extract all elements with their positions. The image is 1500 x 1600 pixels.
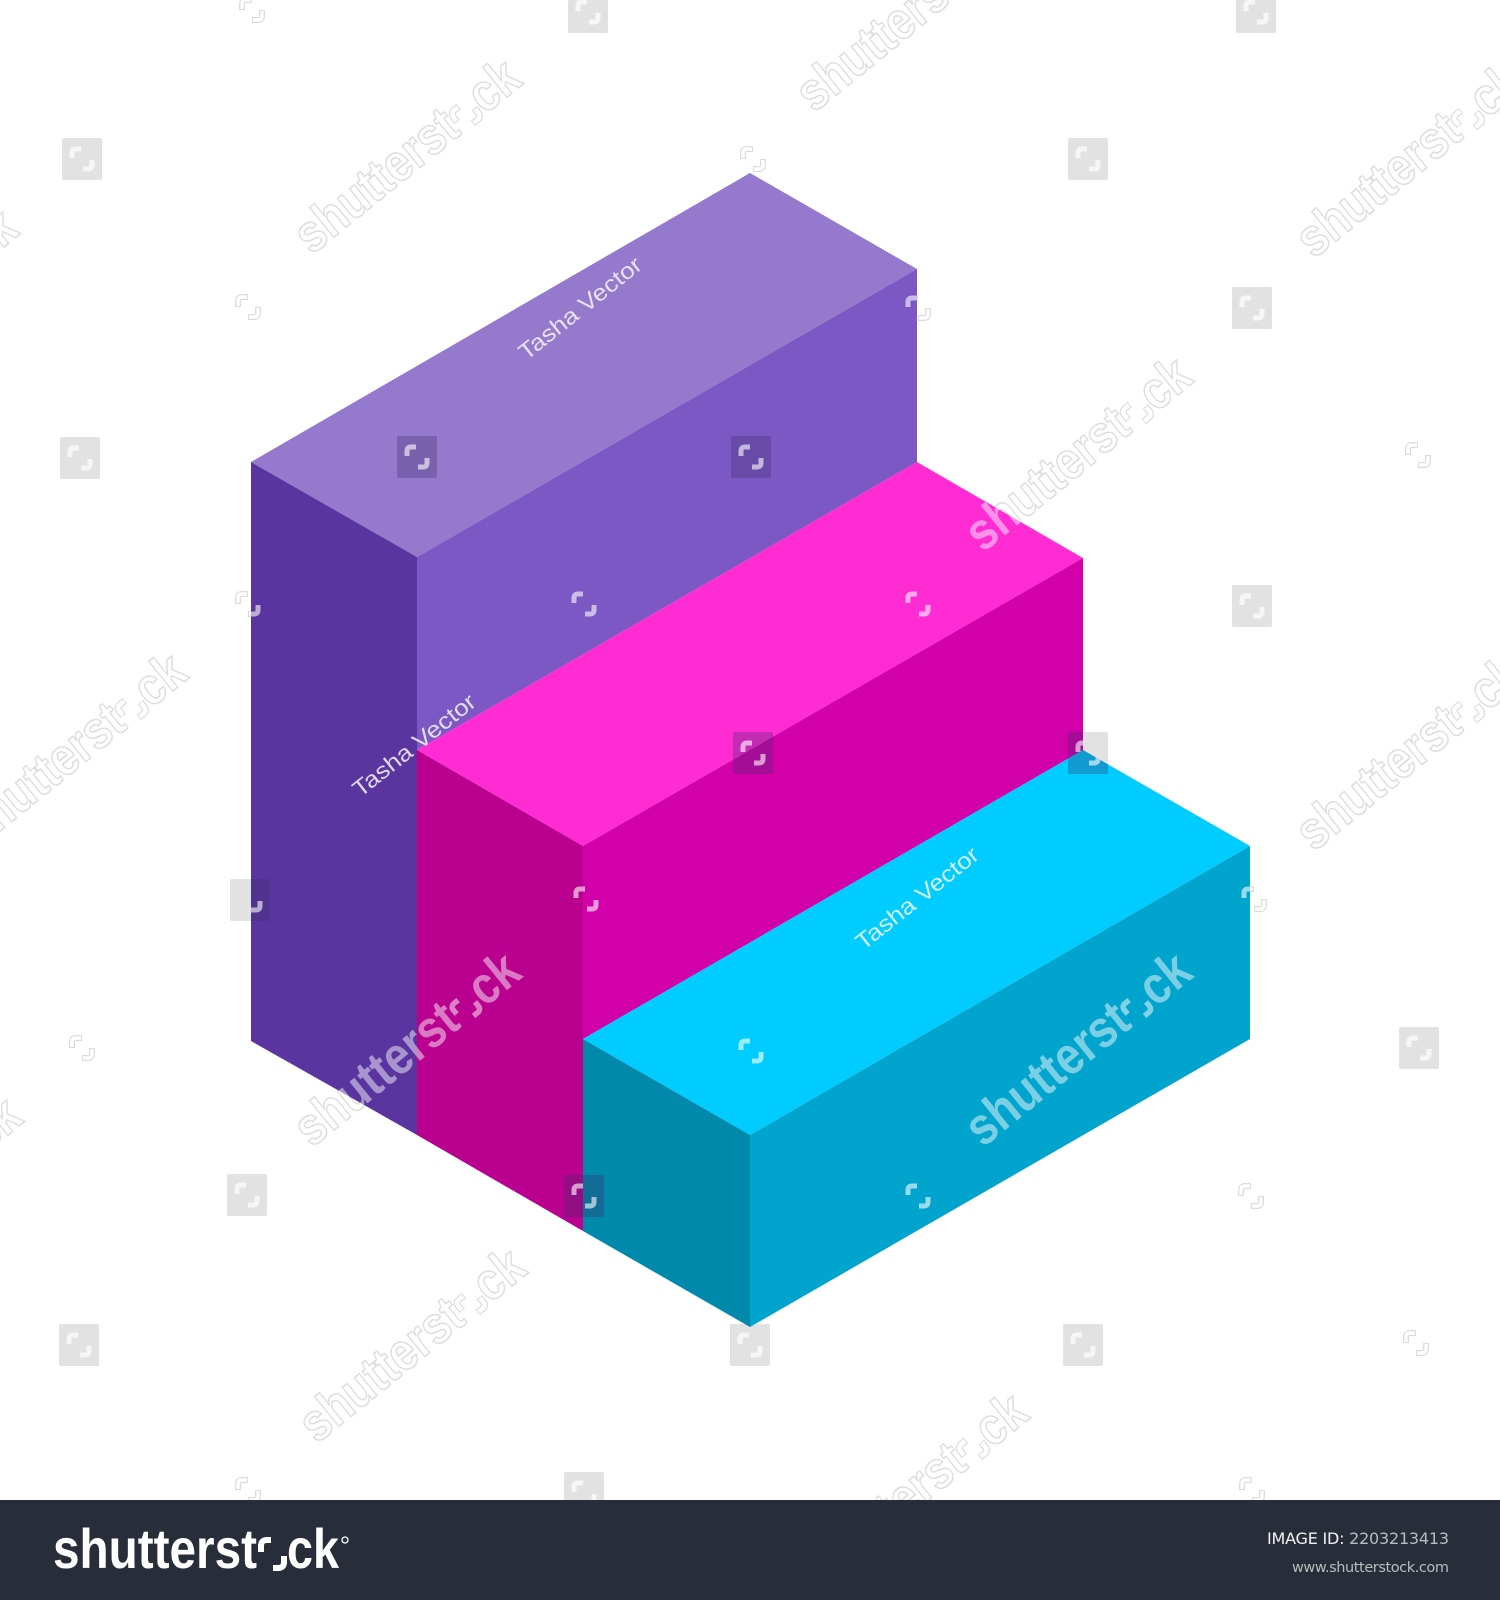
shutterstock logo: ck	[287, 1517, 340, 1580]
shutterstock outlined watermarks: shutterst	[1284, 101, 1472, 269]
shutterstock outlined watermarks: ck	[121, 641, 198, 718]
filled shutterstock watermarks: ck	[455, 940, 532, 1017]
shutterstock outlined watermarks: ck	[1126, 345, 1203, 422]
website: www.shutterstock.com	[1292, 1560, 1449, 1576]
shutterstock outlined watermarks: ck	[460, 1236, 537, 1313]
image id: IMAGE ID: 2203213413	[1267, 1529, 1449, 1548]
light watermark icons	[238, 298, 1264, 1206]
author credit labels	[347, 251, 984, 955]
shutterstock outlined watermarks: shutterst	[953, 395, 1141, 563]
footer band	[0, 1500, 1500, 1600]
dark watermark tiles	[230, 436, 1108, 1217]
magenta middle step	[417, 462, 1083, 1231]
shutterstock outlined watermarks: ck	[962, 1381, 1039, 1458]
filled shutterstock watermarks: shutterst	[953, 990, 1141, 1158]
filled shutterstock watermarks: shutterst	[282, 990, 470, 1158]
shutterstock outlined watermarks: shutterst	[1284, 694, 1472, 862]
filled shutterstock watermarks: ck	[1126, 345, 1203, 422]
shutterstock outlined watermarks: shutterst	[282, 990, 470, 1158]
isometric stair chart	[251, 173, 1250, 1327]
shutterstock logo: shutterst	[53, 1517, 257, 1580]
shutterstock outlined watermarks: ck	[455, 47, 532, 124]
shutterstock outlined watermarks: shutterst	[287, 1286, 475, 1454]
cyan low step	[583, 750, 1250, 1327]
filled shutterstock watermarks	[338, 502, 1195, 1144]
filled shutterstock watermarks: shutterst	[953, 395, 1141, 563]
purple tall step	[251, 173, 917, 1135]
shutterstock outlined watermarks: shutterst	[789, 1431, 977, 1599]
author credit labels: Tasha Vector	[513, 251, 647, 365]
author credit labels: Tasha Vector	[347, 688, 481, 802]
author credit labels: Tasha Vector	[850, 841, 984, 955]
shutterstock outlined watermarks: ck	[455, 940, 532, 1017]
filled shutterstock watermarks: ck	[1126, 940, 1203, 1017]
watermark overlay on coloured faces	[230, 298, 1264, 1217]
shutterstock outlined watermarks: shutterst	[282, 97, 470, 265]
